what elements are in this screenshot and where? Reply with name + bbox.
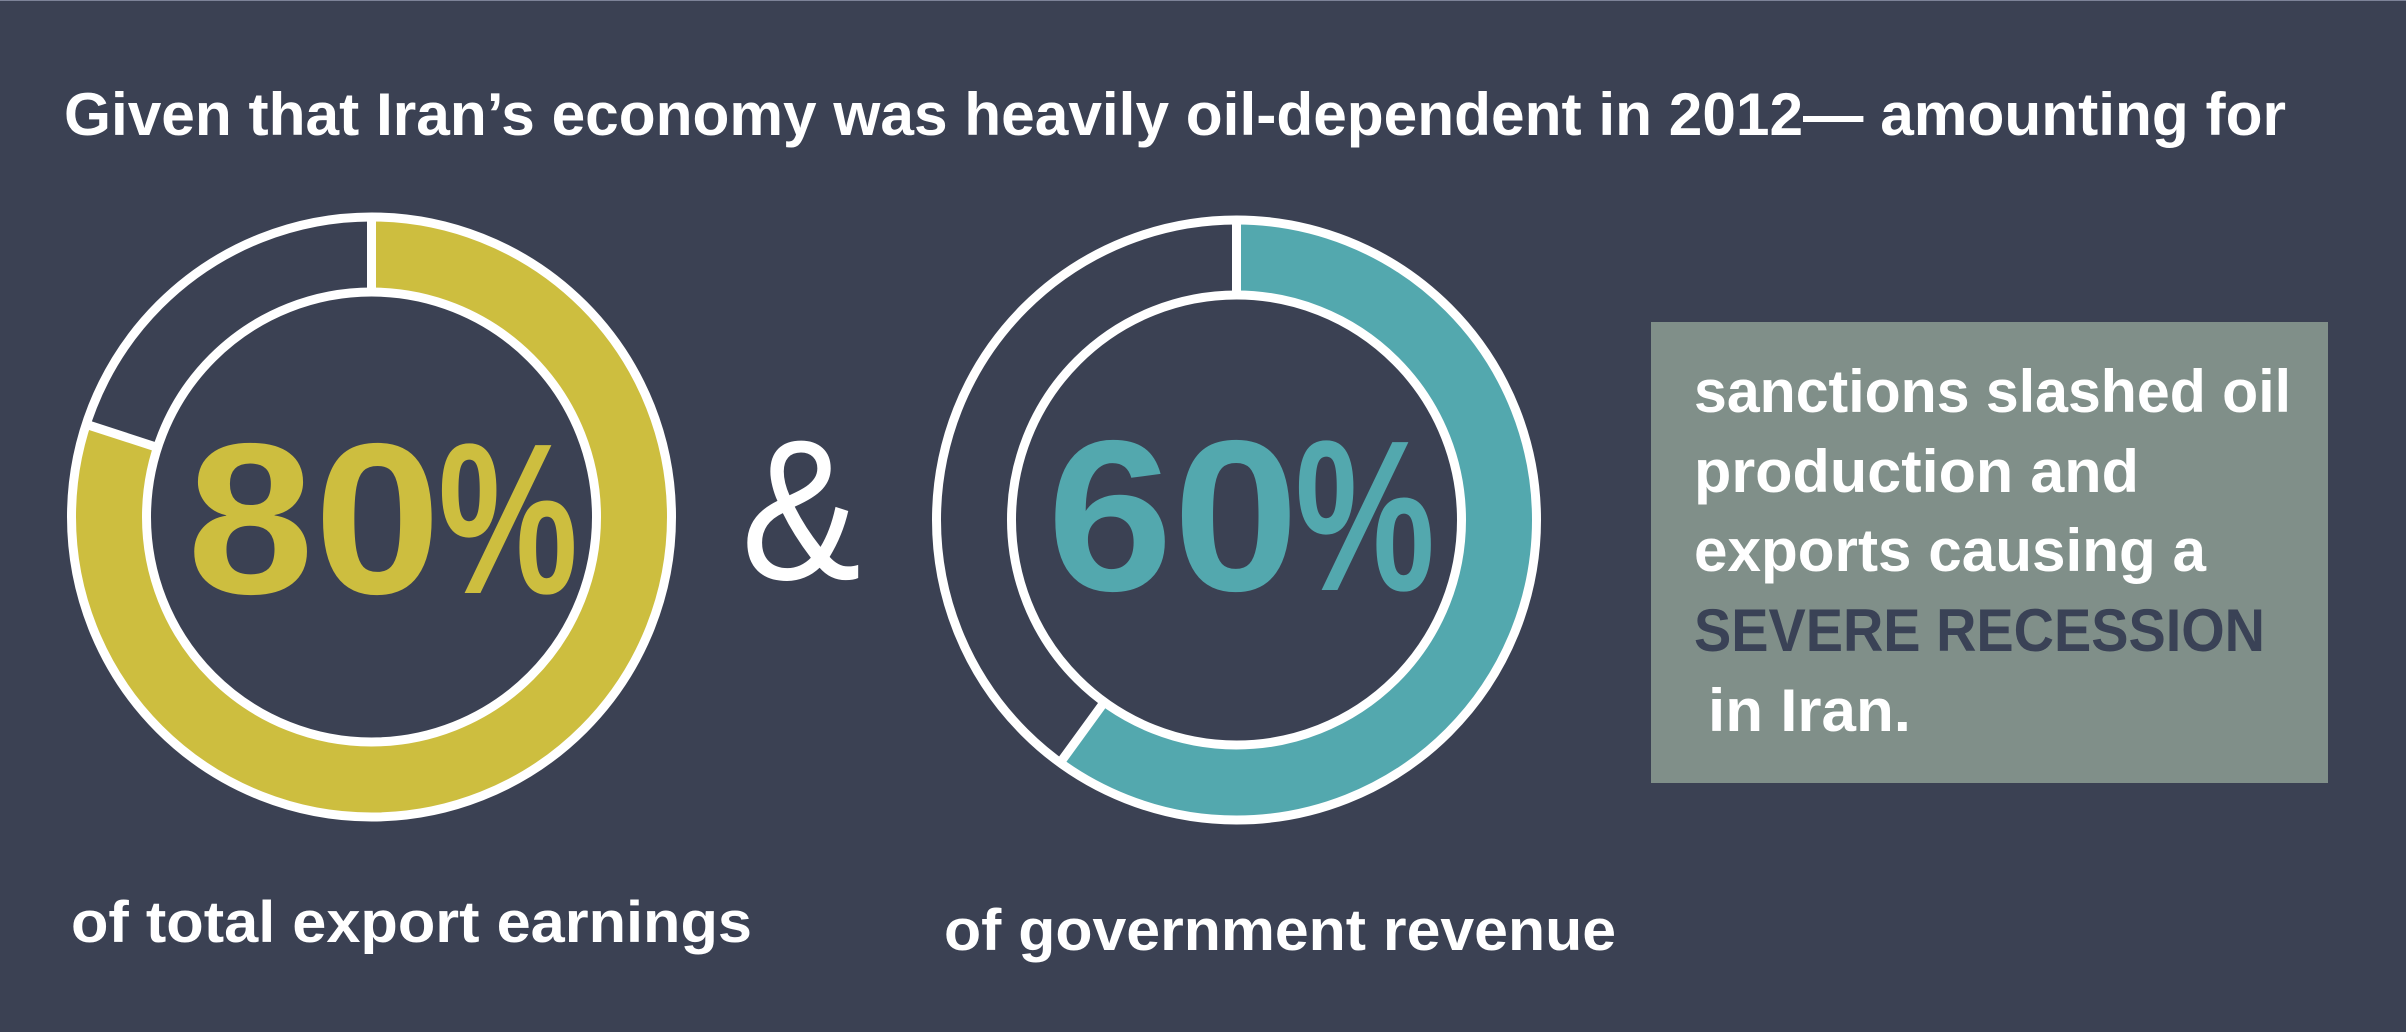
ampersand: & <box>741 399 861 622</box>
callout text line 1: sanctions slashed oil <box>1694 358 2291 425</box>
donut chart: 80% of total export earnings <box>72 217 672 817</box>
callout text line 5: in Iran. <box>1708 677 1911 744</box>
title: Given that Iran’s economy was heavily oil-dependent in 2012— amounting for <box>64 81 2286 148</box>
value: 80% <box>187 398 578 639</box>
value: 60%: % <box>1295 395 1435 636</box>
donut chart: 60% of government revenue <box>936 220 1536 820</box>
value: 60% <box>1047 395 1435 636</box>
panel: sanctions callout <box>1651 322 2328 783</box>
callout text line 3: exports causing a <box>1694 517 2207 584</box>
label: of government revenue: of government revenue <box>944 898 1616 963</box>
label: of total export earnings: of total export earnings <box>71 890 752 955</box>
value: 60%: 60 <box>1047 395 1299 636</box>
callout emphasis: SEVERE RECESSION: SEVERE RECESSION <box>1694 597 2265 664</box>
donut outlines and dividers <box>72 217 672 817</box>
value: 80%: 80 <box>187 398 441 639</box>
donut segment: 60% teal arc <box>1082 258 1499 782</box>
donut segment: 80% yellow arc <box>109 254 634 779</box>
callout text line 2: production and <box>1694 438 2139 505</box>
callout background <box>1651 322 2328 783</box>
donut outlines and dividers <box>936 220 1536 820</box>
value: 80%: % <box>438 398 578 639</box>
